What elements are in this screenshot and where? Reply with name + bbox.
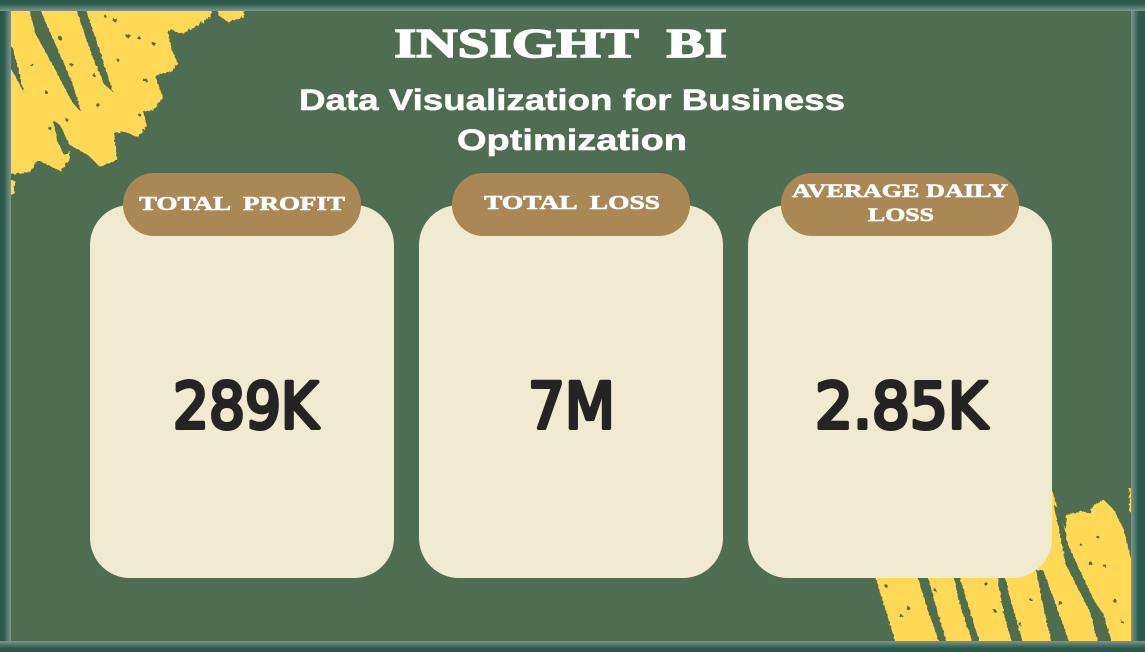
- label pill: total profit: TOTAL PROFIT: [139, 193, 346, 215]
- card background: [419, 205, 723, 578]
- card background: [748, 205, 1052, 578]
- label pill: total profit: [123, 173, 361, 236]
- panel: total profit: [90, 173, 394, 578]
- value: 289K: 289K: [173, 370, 320, 443]
- label pill: average daily loss: AVERAGE DAILY: [792, 181, 1008, 202]
- panel: total loss: [419, 173, 723, 578]
- label pill: average daily loss: [781, 173, 1019, 236]
- decoration: yellow scribble top left: [5, 5, 245, 195]
- label pill: average daily loss: LOSS: [868, 205, 934, 226]
- value: 7M: 7M: [528, 370, 615, 443]
- subtitle: Data Visualization for Business: [299, 84, 845, 117]
- label pill: total loss: TOTAL LOSS: [484, 192, 660, 214]
- card background: [90, 205, 394, 578]
- label pill: total loss: [452, 173, 690, 236]
- panel: average daily loss: [748, 173, 1052, 578]
- subtitle: [299, 84, 845, 157]
- title: INSIGHT BI: [394, 20, 727, 66]
- subtitle: Optimization: [457, 124, 687, 157]
- decoration: yellow scribble bottom right: [875, 488, 1140, 650]
- value: 2.85K: 2.85K: [815, 370, 989, 443]
